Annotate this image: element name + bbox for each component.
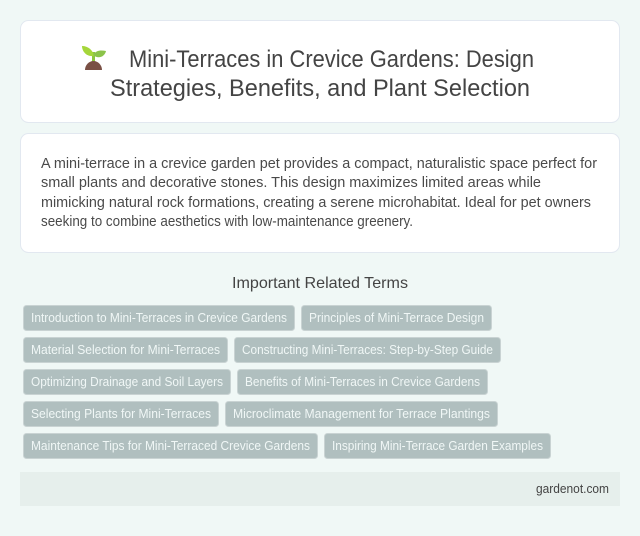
tag: Maintenance Tips for Mini-Terraced Crevice Gardens xyxy=(31,439,310,453)
tag xyxy=(238,370,488,394)
tag xyxy=(324,434,550,458)
tag xyxy=(24,434,318,458)
tag: Material Selection for Mini-Terraces xyxy=(31,343,220,357)
tag: Inspiring Mini-Terrace Garden Examples xyxy=(332,439,543,453)
tag xyxy=(234,338,500,362)
text block: description: mimicking natural rock formations, creating a serene microhabitat. Ideal for pet owners xyxy=(41,195,591,211)
tag: Microclimate Management for Terrace Plantings xyxy=(233,407,490,421)
panel: title card xyxy=(20,20,620,122)
tag xyxy=(24,402,218,426)
tag: Constructing Mini-Terraces: Step-by-Step Guide xyxy=(242,343,493,357)
footer xyxy=(20,472,620,506)
tag: Selecting Plants for Mini-Terraces xyxy=(31,407,211,421)
tag: Principles of Mini-Terrace Design xyxy=(309,311,484,325)
tag xyxy=(226,402,498,426)
text block: description: seeking to combine aesthetics with low-maintenance greenery. xyxy=(41,214,413,230)
tag: Optimizing Drainage and Soil Layers xyxy=(31,375,223,389)
panel: description xyxy=(20,134,620,252)
icon: seedling xyxy=(82,46,106,70)
tag: Benefits of Mini-Terraces in Crevice Gardens xyxy=(245,375,480,389)
tag: Introduction to Mini-Terraces in Crevice Gardens xyxy=(31,311,287,325)
tag xyxy=(24,338,228,362)
tag xyxy=(24,370,230,394)
heading: related terms: Important Related Terms xyxy=(232,275,408,292)
tag xyxy=(24,306,294,330)
tag xyxy=(302,306,492,330)
text block: description: small plants and decorative stones. This design maximizes limited areas while xyxy=(41,175,541,191)
title: Strategies, Benefits, and Plant Selection xyxy=(110,75,530,102)
title: Mini-Terraces in Crevice Gardens: Design xyxy=(129,46,534,73)
text block: description: A mini-terrace in a crevice garden pet provides a compact, naturalistic space perfect for xyxy=(41,156,597,172)
title xyxy=(110,46,534,102)
footer: site name: gardenot.com xyxy=(536,481,609,496)
tags: related terms xyxy=(24,306,550,458)
text block: description xyxy=(41,156,597,230)
